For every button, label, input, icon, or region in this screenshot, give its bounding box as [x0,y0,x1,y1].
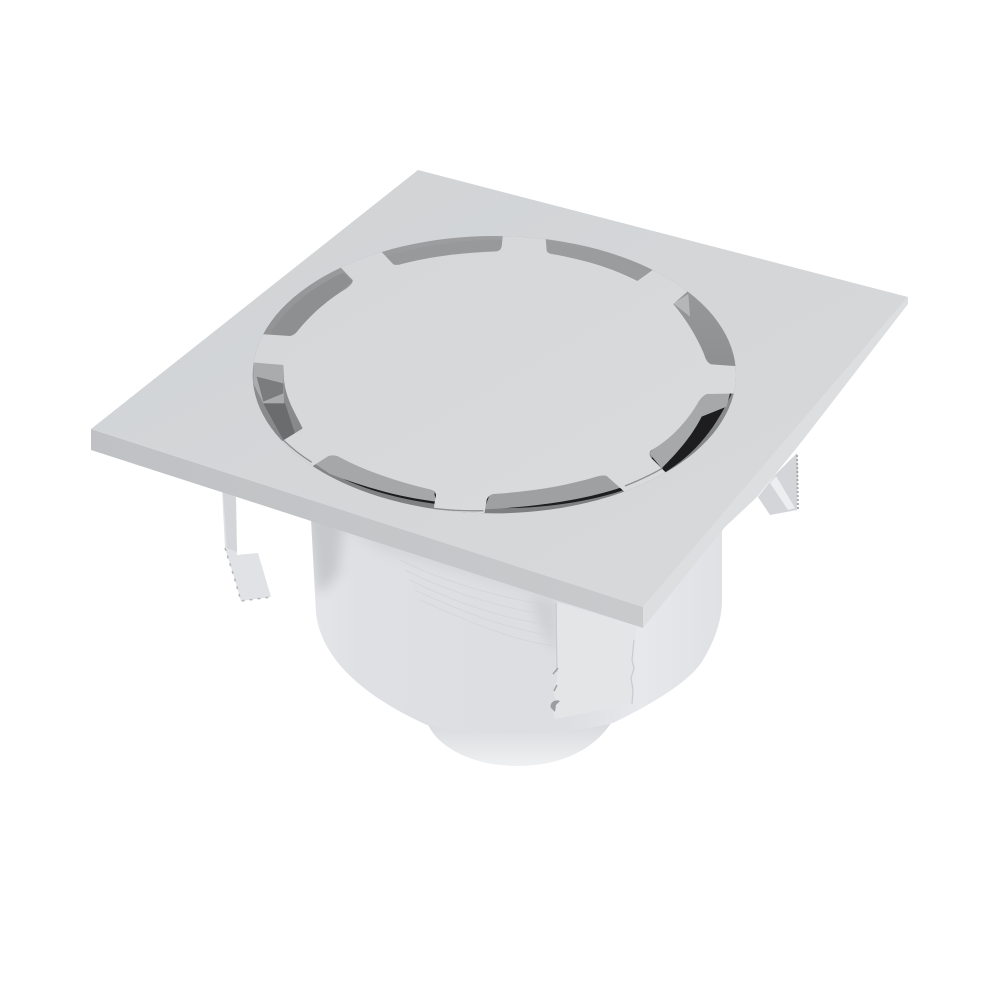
left block [253,362,284,403]
square plate: side faces [91,297,908,628]
front bracket with serrated edges [551,602,637,719]
nozzle: lower outlet pipe [427,720,613,766]
square plate: top face [91,170,908,607]
lower centre support lip [484,474,625,509]
left lower slot shadow [263,403,295,440]
bracket shaded edges [556,603,634,704]
lower right support lip [649,393,730,468]
drain body: threaded cylinder [305,500,722,733]
grate disc with eight tabs [243,230,743,520]
dark gap at lower rim [327,390,733,508]
left spring clip [222,490,271,601]
shadow under the plate [311,521,346,592]
bracket notches [551,700,560,712]
lower left support lip [312,454,436,502]
round grate assembly [243,230,743,520]
disc lower lip [283,440,662,511]
product illustration: square floor drain [91,170,908,766]
upper centre slot shading [383,240,503,265]
round opening [253,236,736,513]
upper right tab block [673,294,690,317]
right spring clip [758,453,798,515]
